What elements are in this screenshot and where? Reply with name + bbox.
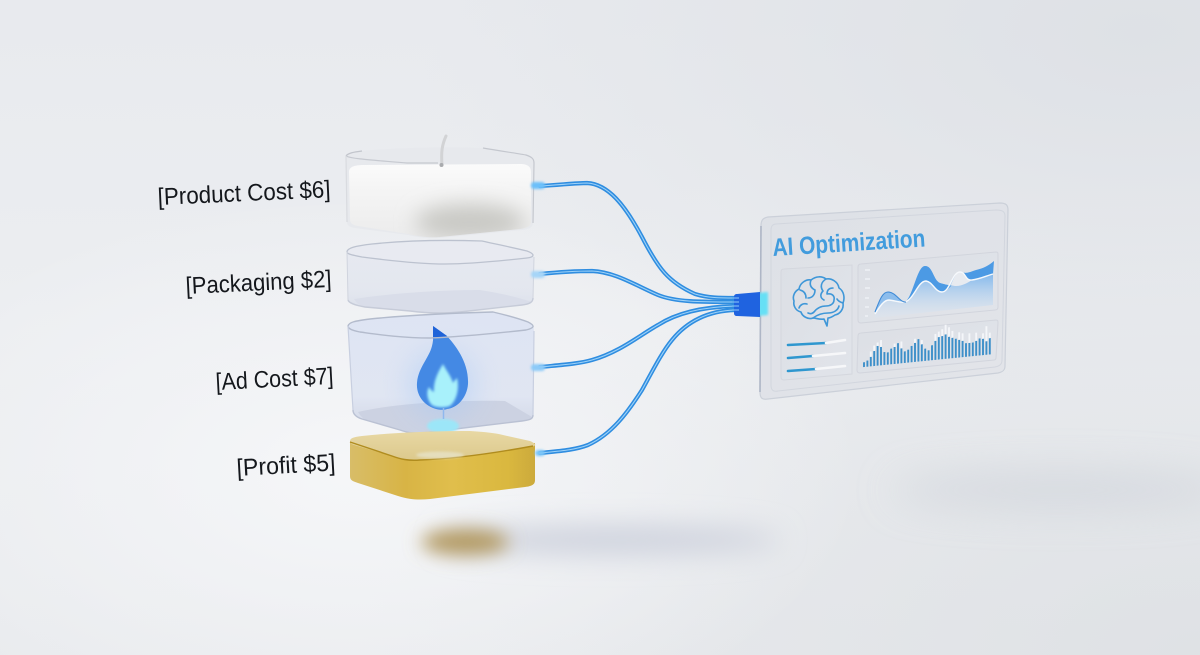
bars [864, 320, 990, 367]
sub-panel: line chart [858, 252, 998, 323]
chart axis ticks [865, 270, 870, 316]
sliders [788, 340, 845, 371]
label: packaging: [Packaging $2] [185, 266, 332, 300]
icon: brain [793, 277, 844, 326]
layer: candle wax in glass [345, 136, 535, 240]
icon: flame [408, 326, 476, 433]
layer: profit gold block [350, 431, 535, 500]
panel title: AI Optimization [772, 224, 926, 262]
blue band [875, 266, 951, 314]
sub-panel: brain and sliders [781, 265, 852, 380]
layer: packaging glass [347, 240, 534, 313]
floor shadows [421, 472, 1200, 555]
white line [875, 272, 993, 314]
area under white line [875, 272, 993, 318]
panel: AI optimization [760, 203, 1008, 399]
wire connector [732, 292, 768, 317]
wire glow ends [531, 182, 545, 456]
candle wax [349, 164, 531, 238]
chart lens [951, 272, 972, 286]
layer: ad cost glass with flame [348, 312, 534, 433]
label: profit: [Profit $5] [236, 450, 336, 482]
sub-panel: bar chart [857, 320, 998, 373]
label: product cost: [Product Cost $6] [157, 176, 331, 211]
connector wires [540, 183, 735, 453]
candle wick [442, 136, 446, 165]
label: ad cost: [Ad Cost $7] [215, 363, 334, 396]
